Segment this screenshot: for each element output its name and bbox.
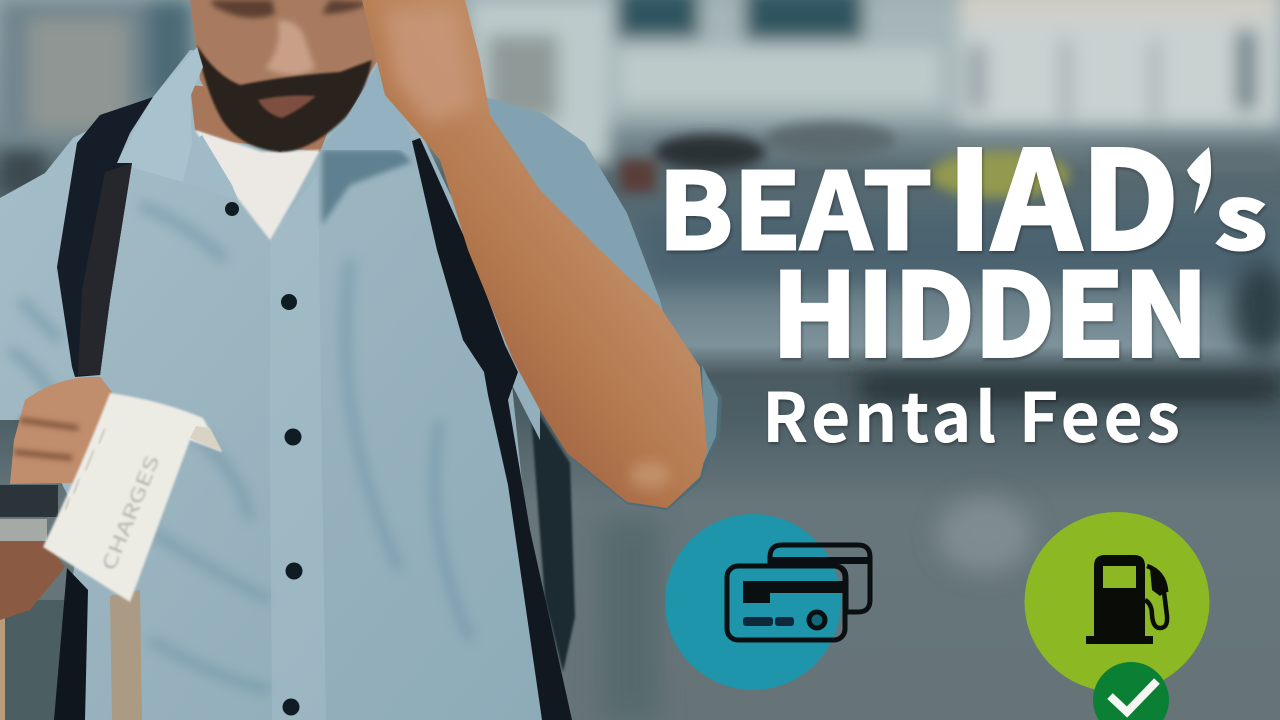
shirt torso and left sleeve — [0, 50, 545, 720]
neck — [190, 85, 340, 152]
collar shadow — [322, 150, 412, 225]
title — [658, 92, 1267, 462]
title line: BEAT: BEAT — [658, 128, 932, 280]
eye shadow and nose — [212, 0, 372, 75]
man with backpack — [0, 0, 722, 720]
hand highlight — [385, 10, 475, 125]
front card — [727, 566, 845, 640]
right backpack strap — [412, 138, 572, 720]
holding hand — [0, 377, 112, 620]
face — [190, 0, 385, 152]
receipt — [43, 393, 222, 602]
title line: HIDDEN: HIDDEN — [772, 224, 1208, 389]
subtitle: Rental Fees: Rental Fees — [762, 363, 1180, 462]
raised arm and hand — [362, 0, 707, 508]
rolling luggage background gap — [0, 600, 75, 720]
pump hose — [1145, 566, 1167, 628]
green circle — [1024, 512, 1210, 692]
icon: credit cards — [665, 514, 870, 690]
title: possessive s: s — [1215, 148, 1267, 275]
icon: check badge — [1093, 662, 1169, 720]
left backpack strap — [57, 97, 153, 377]
luggage handle — [0, 485, 142, 720]
white undershirt — [195, 130, 320, 240]
right collar — [320, 65, 417, 158]
shirt buttons — [225, 202, 302, 716]
shirt placket — [270, 175, 326, 720]
right sleeve — [470, 97, 665, 320]
receipt printed text: CHARGES — [95, 451, 165, 574]
title: IAD: IAD — [947, 92, 1179, 288]
icon: fuel pump — [1024, 512, 1210, 692]
title: apostrophe — [1187, 147, 1211, 214]
backpack, right side — [530, 400, 575, 672]
mouth — [258, 96, 316, 118]
beard — [197, 45, 372, 152]
back card — [770, 545, 870, 612]
pump body — [1086, 555, 1153, 644]
left collar — [117, 47, 203, 182]
teal circle — [665, 514, 841, 690]
sleeve rim at elbow — [567, 360, 722, 510]
lower strap — [54, 568, 88, 720]
elbow highlight — [630, 461, 670, 489]
shirt folds — [10, 205, 470, 690]
